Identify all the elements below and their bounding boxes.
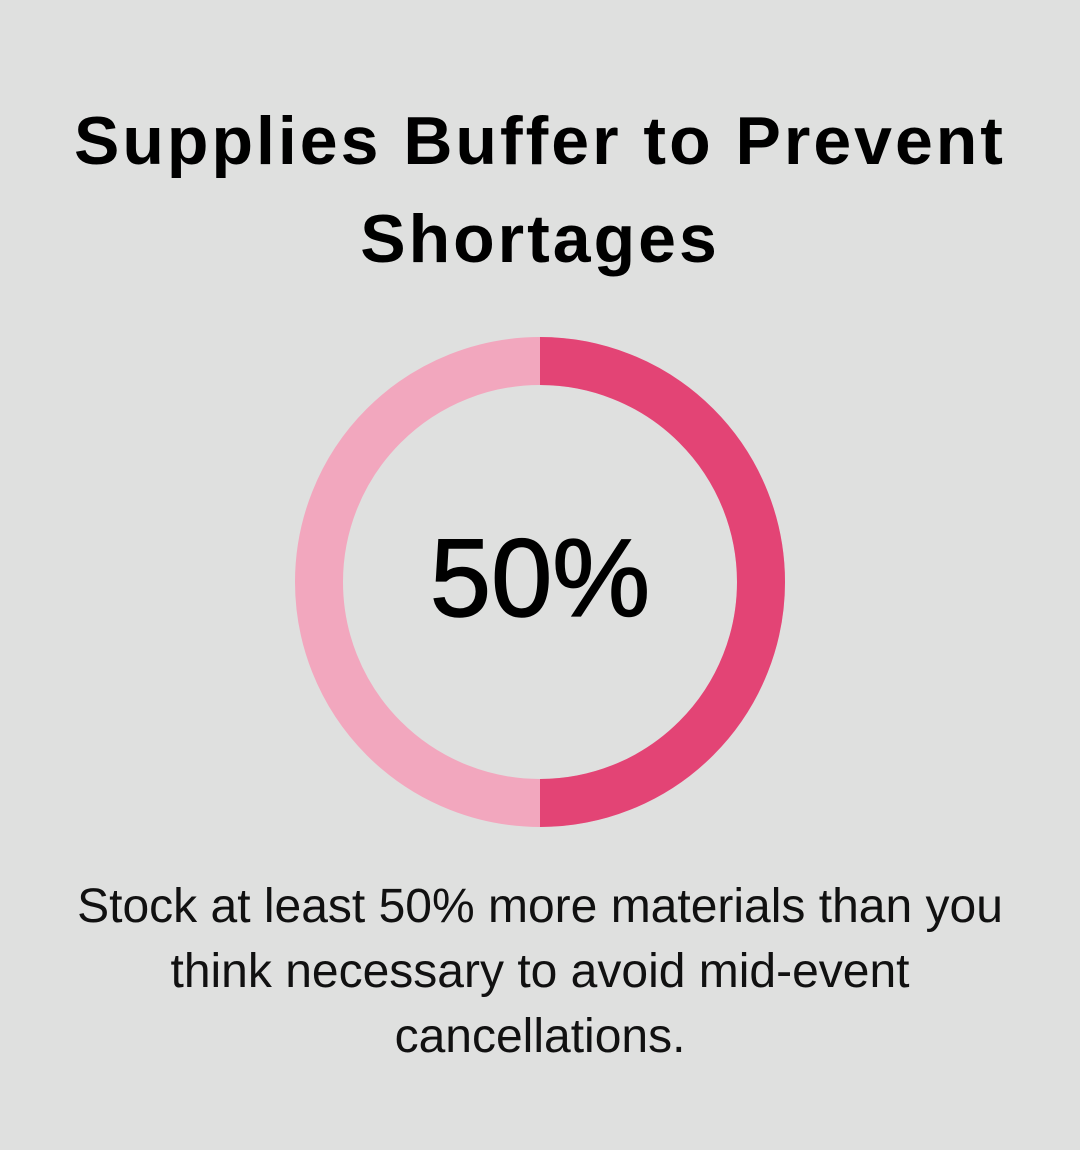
ring: remaining segment [319, 361, 761, 803]
ring: 50% segment [540, 361, 761, 803]
description text [77, 880, 1003, 1063]
title: Supplies Buffer to Prevent [74, 103, 1006, 179]
description text: Stock at least 50% more materials than you [77, 880, 1003, 933]
description text: cancellations. [395, 1010, 685, 1063]
title [74, 103, 1006, 277]
donut chart [295, 337, 785, 827]
center value: 50% [430, 517, 650, 640]
description text: think necessary to avoid mid-event [170, 945, 910, 998]
title: Shortages [360, 201, 720, 277]
